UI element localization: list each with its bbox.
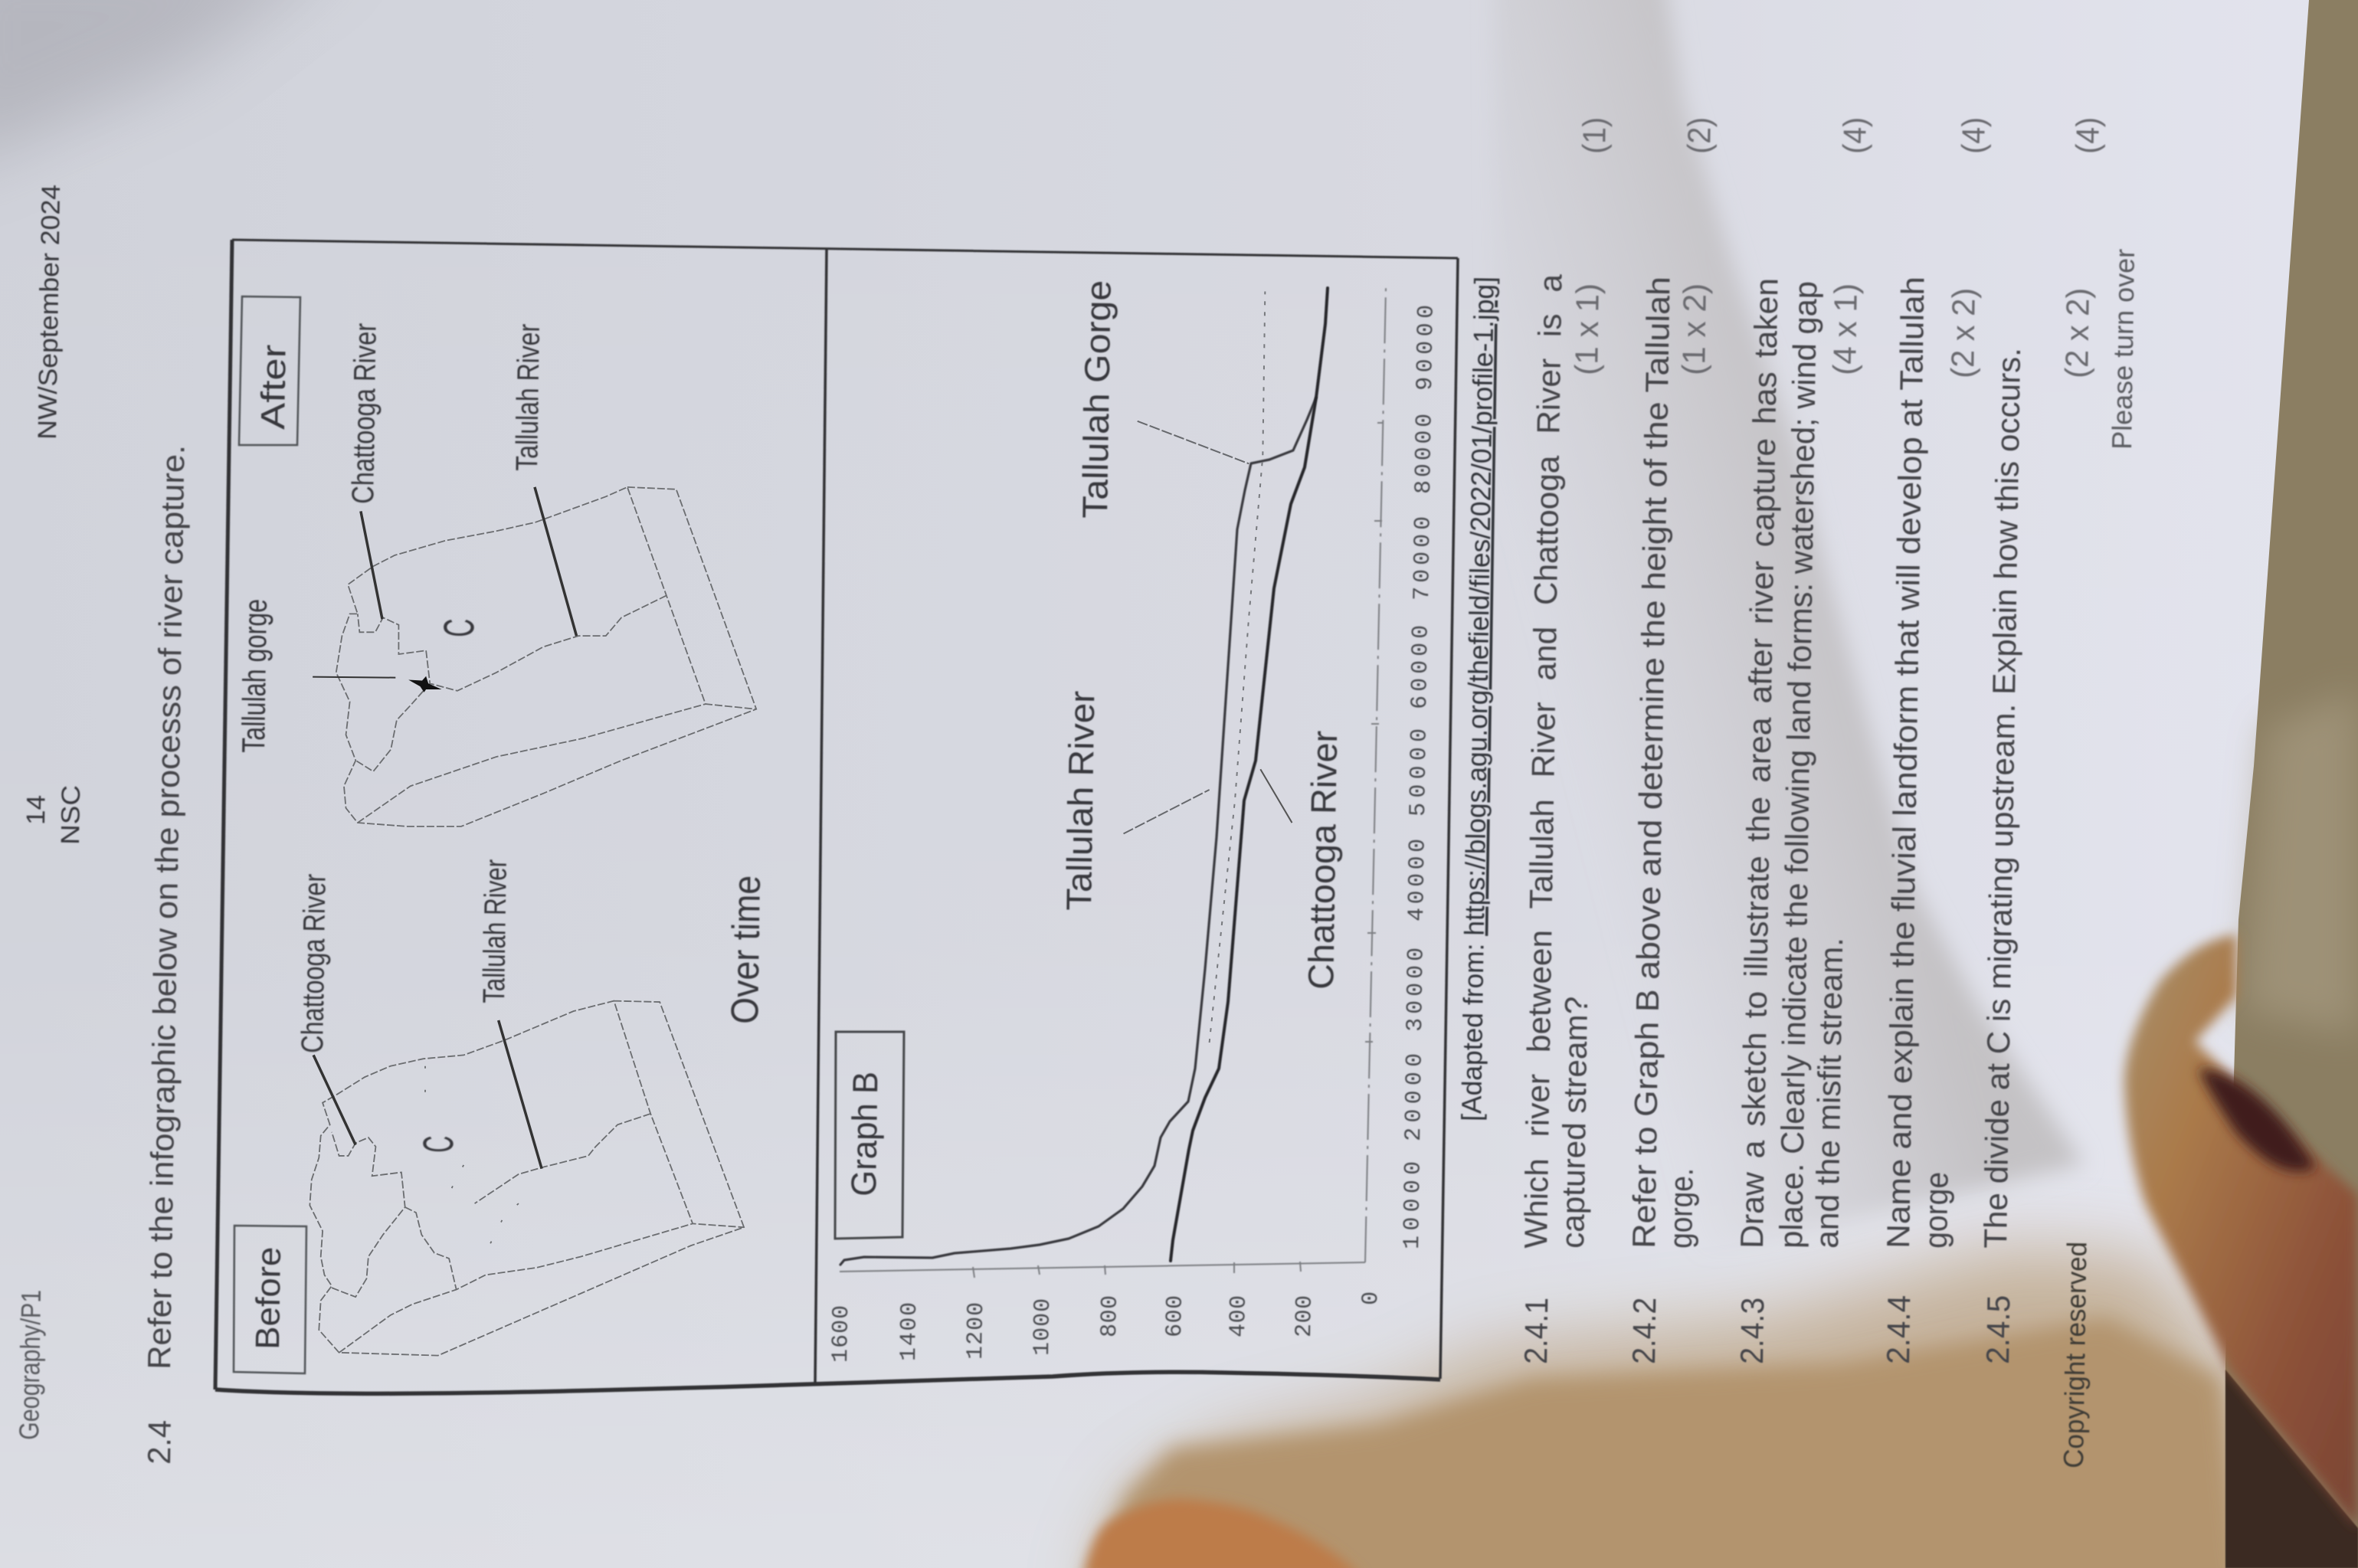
question 2.4.5: 2.4.5 (1980, 1295, 2016, 1364)
block diagram: before capture (309, 1001, 744, 1356)
bottom finger (1084, 1499, 1362, 1568)
instruction: Refer to the infographic below on the processs of river capture. (141, 445, 192, 1370)
panel: Graph B longitudinal profiles (828, 280, 1440, 1363)
chart: distance axis labels: 10000 (1400, 1161, 1427, 1249)
chart: distance axis labels: 80000 (1411, 414, 1439, 494)
question 2.4.5 (1977, 116, 2106, 1364)
chart labels (1059, 280, 1344, 990)
chart: vertical axis labels: 1600 (828, 1305, 855, 1363)
label: Chattooga River after: Chattooga River (346, 322, 383, 504)
question 2.4.4 (1880, 116, 1992, 1364)
question 2.4.5: (2 x 2) (2058, 287, 2096, 378)
chart: leader lines (1124, 421, 1292, 833)
question 2.4.2 (1626, 116, 1718, 1364)
question 2.4.2: (1 x 2) (1675, 283, 1713, 375)
panel: river capture block diagrams (234, 296, 768, 1373)
question 2.4.1: (1) (1576, 116, 1613, 154)
label: Tallulah River: Tallulah River (1059, 690, 1102, 911)
question number: 2.4 (141, 1419, 178, 1465)
question 2.4.5: The divide at C is migrating upstream. Explain how this occurs. (1977, 348, 2027, 1249)
question 2.4.3: 2.4.3 (1734, 1297, 1770, 1364)
chart: vertical axis labels: 1400 (896, 1302, 923, 1361)
header: subject: Geography/P1 (13, 1290, 47, 1440)
block diagram: after capture (313, 487, 756, 827)
finger crease (2199, 1069, 2316, 1171)
question 2.4.3 (1734, 116, 1873, 1364)
label: Chattooga River before: Chattooga River (296, 873, 332, 1053)
source citation: [Adapted from: https://blogs.agu.org/thefield/files/2022/01/profile-1.jpg] (1456, 277, 1500, 1121)
question 2.4.4: Name and explain the fluvial landform that will develop at Tallulah (1880, 277, 1931, 1249)
label box: Graph B (835, 1032, 904, 1239)
label: Tallulah River after: Tallulah River (510, 323, 546, 471)
question 2.4.3: Draw a sketch to illustrate the area after river capture has taken (1734, 278, 1784, 1249)
question 2.4.1 (1518, 116, 1613, 1364)
question 2.4.2: Refer to Graph B above and determine the height of the Tallulah (1626, 277, 1676, 1249)
label box: Graph B: Graph B (843, 1071, 886, 1196)
chart: Chattooga River profile (1171, 288, 1328, 1261)
chart: distance axis labels: 30000 (1403, 948, 1430, 1032)
label: Tallulah gorge: Tallulah gorge (235, 598, 273, 753)
dark gap below the finger (2225, 1370, 2358, 1568)
question 2.4.2: gorge. (1662, 1167, 1700, 1249)
label box: Before: Before (249, 1246, 288, 1350)
chart: distance axis labels: 20000 (1401, 1053, 1429, 1141)
chart: distance axis labels: 40000 (1404, 839, 1432, 921)
label: Tallulah River before: Tallulah River (477, 859, 513, 1003)
footer: please turn over: Please turn over (2106, 249, 2140, 450)
chart: distance axis labels: 90000 (1413, 305, 1440, 391)
question 2.4.1: (1 x 1) (1568, 283, 1606, 375)
question 2.4.4: 2.4.4 (1880, 1295, 1917, 1364)
question 2.4.2: 2.4.2 (1626, 1297, 1662, 1364)
header: page number: 14 (21, 795, 51, 825)
chart: Tallulah River profile (840, 398, 1316, 1265)
question 2.4.4: gorge (1918, 1171, 1955, 1249)
frame around infographic (215, 240, 1458, 1393)
label: Tallulah Gorge: Tallulah Gorge (1075, 280, 1118, 519)
chart: vertical axis labels: 400 (1226, 1295, 1253, 1337)
chart: dotted projected profile (1210, 291, 1265, 1043)
question 2.4.3: (4) (1836, 116, 1873, 154)
chart: vertical axis labels (828, 1291, 1384, 1363)
chart: vertical axis labels: 0 (1358, 1291, 1384, 1305)
question 2.4.4: (2 x 2) (1944, 287, 1982, 378)
cloth behind the paper (2225, 0, 2358, 1568)
question 2.4.3: (4 x 1) (1826, 283, 1864, 375)
page header (13, 185, 86, 1440)
chart: distance axis labels (1400, 305, 1440, 1249)
label box: After: After (254, 344, 293, 430)
label box: After (239, 296, 300, 445)
chart: distance axis labels: 60000 (1407, 625, 1435, 709)
chart: axes (840, 288, 1386, 1278)
label box: Before (234, 1226, 306, 1373)
chart: vertical axis labels: 600 (1162, 1295, 1189, 1337)
footer: copyright: Copyright reserved (2058, 1242, 2093, 1468)
question intro (141, 445, 192, 1465)
chart: vertical axis labels: 800 (1097, 1295, 1124, 1337)
chart: vertical axis labels: 200 (1292, 1295, 1318, 1337)
label: C before: C (414, 1135, 462, 1153)
label: C after: C (434, 618, 483, 637)
chart: vertical axis labels: 1200 (963, 1302, 990, 1360)
question 2.4.3: place. Clearly indicate the following land forms: watershed; wind gap (1773, 281, 1823, 1249)
right finger (2124, 935, 2358, 1528)
diagram labels (235, 322, 768, 1153)
label: Chattooga River: Chattooga River (1301, 730, 1344, 990)
chart: distance axis labels: 50000 (1406, 728, 1433, 817)
questions (1518, 116, 2106, 1364)
question 2.4.4: (4) (1955, 116, 1992, 154)
chart: vertical axis labels: 1000 (1030, 1298, 1056, 1356)
header: date: NW/September 2024 (33, 185, 66, 440)
question 2.4.3: and the misfit stream. (1809, 937, 1849, 1249)
question 2.4.1: Which river between Tallulah River and Chattooga River is a (1518, 273, 1569, 1249)
chart: distance axis labels: 70000 (1410, 516, 1437, 601)
question 2.4.5: (4) (2069, 116, 2106, 154)
question 2.4.2: (2) (1681, 116, 1718, 154)
header: NSC: NSC (56, 785, 86, 845)
label: Over time: Over time (723, 875, 768, 1024)
question 2.4.1: 2.4.1 (1518, 1297, 1554, 1364)
question 2.4.1: captured stream? (1554, 996, 1594, 1249)
